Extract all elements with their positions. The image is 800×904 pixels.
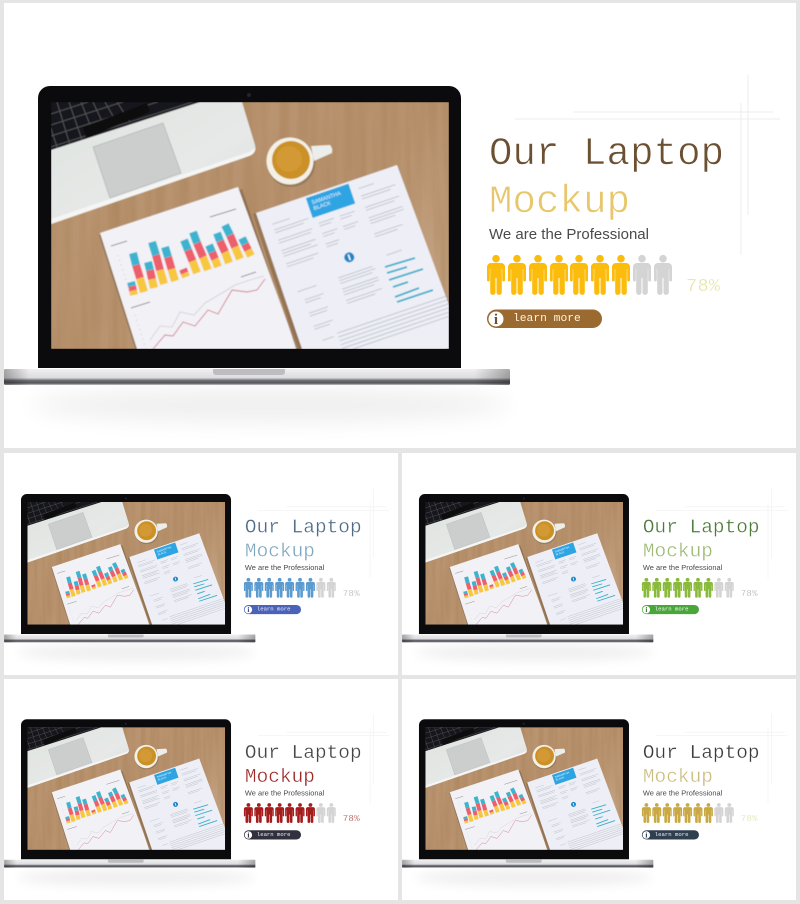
tagline: We are the Professional <box>643 563 723 572</box>
button: learn more: i <box>645 605 647 614</box>
button: learn more: i <box>247 605 249 614</box>
subtitle: Mockup <box>643 766 713 788</box>
decorative frame lines <box>258 489 389 578</box>
panel: red variant <box>4 679 398 900</box>
decorative frame lines <box>258 714 389 803</box>
decorative frame lines <box>656 714 787 803</box>
button: learn more: learn more <box>257 831 291 838</box>
laptop mockup with desk photo <box>4 86 510 423</box>
laptop mockup <box>402 719 653 887</box>
percent value: 78% <box>741 588 758 599</box>
pictogram: 78 percent people <box>244 578 336 598</box>
subtitle: Mockup <box>643 541 713 563</box>
title: Our Laptop <box>643 517 760 539</box>
decorative frame lines <box>656 489 787 578</box>
button: learn more: learn more <box>257 606 291 613</box>
button: learn more: i <box>247 830 249 839</box>
title: Our Laptop <box>245 742 362 764</box>
title: Our Laptop <box>245 517 362 539</box>
button: learn more <box>642 830 699 839</box>
subtitle: Mockup <box>489 180 630 224</box>
panel: main slide <box>4 3 796 448</box>
subtitle: Mockup <box>245 766 315 788</box>
laptop mockup <box>4 719 255 887</box>
panel: blue variant <box>4 453 398 675</box>
pictogram: 78 percent people <box>642 578 734 598</box>
panel: green variant <box>402 453 796 675</box>
percent value: 78% <box>343 588 360 599</box>
subtitle: Mockup <box>245 541 315 563</box>
tagline: We are the Professional <box>245 788 325 797</box>
percent value: 78% <box>343 813 360 824</box>
button: learn more: learn more <box>513 313 581 325</box>
decorative frame lines <box>515 75 780 255</box>
button: learn more <box>487 310 602 328</box>
pictogram: 78 percent people <box>642 803 734 823</box>
laptop mockup <box>4 494 255 661</box>
button: learn more <box>642 605 699 614</box>
laptop mockup <box>402 494 653 661</box>
panel: gold variant <box>402 679 796 900</box>
button: learn more <box>244 830 301 839</box>
pictogram: 78 percent people <box>244 803 336 823</box>
tagline: We are the Professional <box>245 563 325 572</box>
title: Our Laptop <box>643 742 760 764</box>
tagline: We are the Professional <box>643 788 723 797</box>
button: learn more <box>244 605 301 614</box>
tagline: We are the Professional <box>489 226 649 243</box>
button: learn more: learn more <box>655 606 688 613</box>
button: learn more: i <box>645 830 647 839</box>
percent value: 78% <box>741 813 758 824</box>
pictogram: 78 percent people <box>487 255 672 295</box>
title: Our Laptop <box>489 132 724 176</box>
button: learn more: i <box>494 312 498 328</box>
button: learn more: learn more <box>655 831 688 838</box>
percent value: 78% <box>686 276 721 297</box>
